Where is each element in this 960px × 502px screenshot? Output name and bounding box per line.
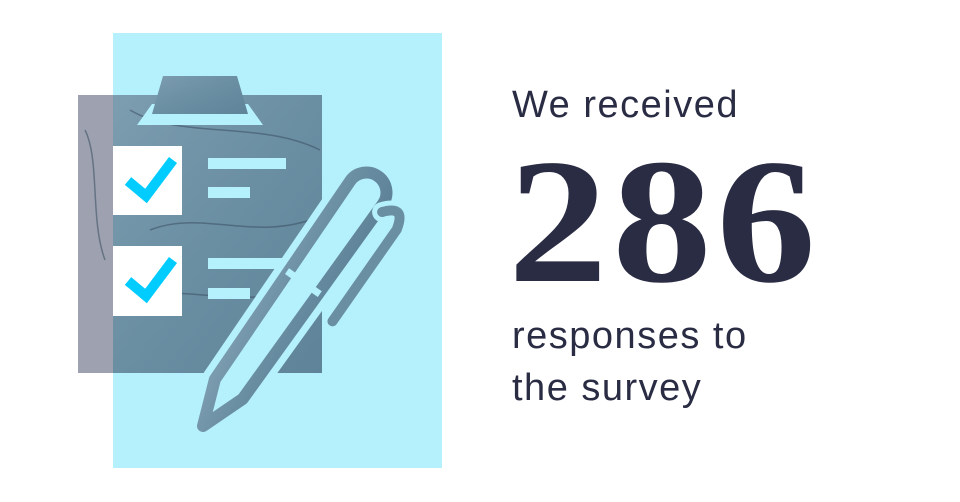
checkbox 2	[113, 246, 182, 316]
big number 286: 286	[508, 122, 820, 320]
clip	[137, 76, 263, 125]
text: We received: We received	[512, 84, 739, 126]
checkbox 1	[113, 146, 182, 215]
clipboard board	[78, 76, 322, 373]
text lines	[208, 158, 286, 299]
text: responses to the survey: the survey	[512, 367, 702, 409]
text: responses to the survey: responses to	[512, 315, 748, 357]
text: responses to the survey	[512, 315, 748, 409]
light blue panel	[113, 33, 442, 468]
pen	[187, 165, 416, 452]
